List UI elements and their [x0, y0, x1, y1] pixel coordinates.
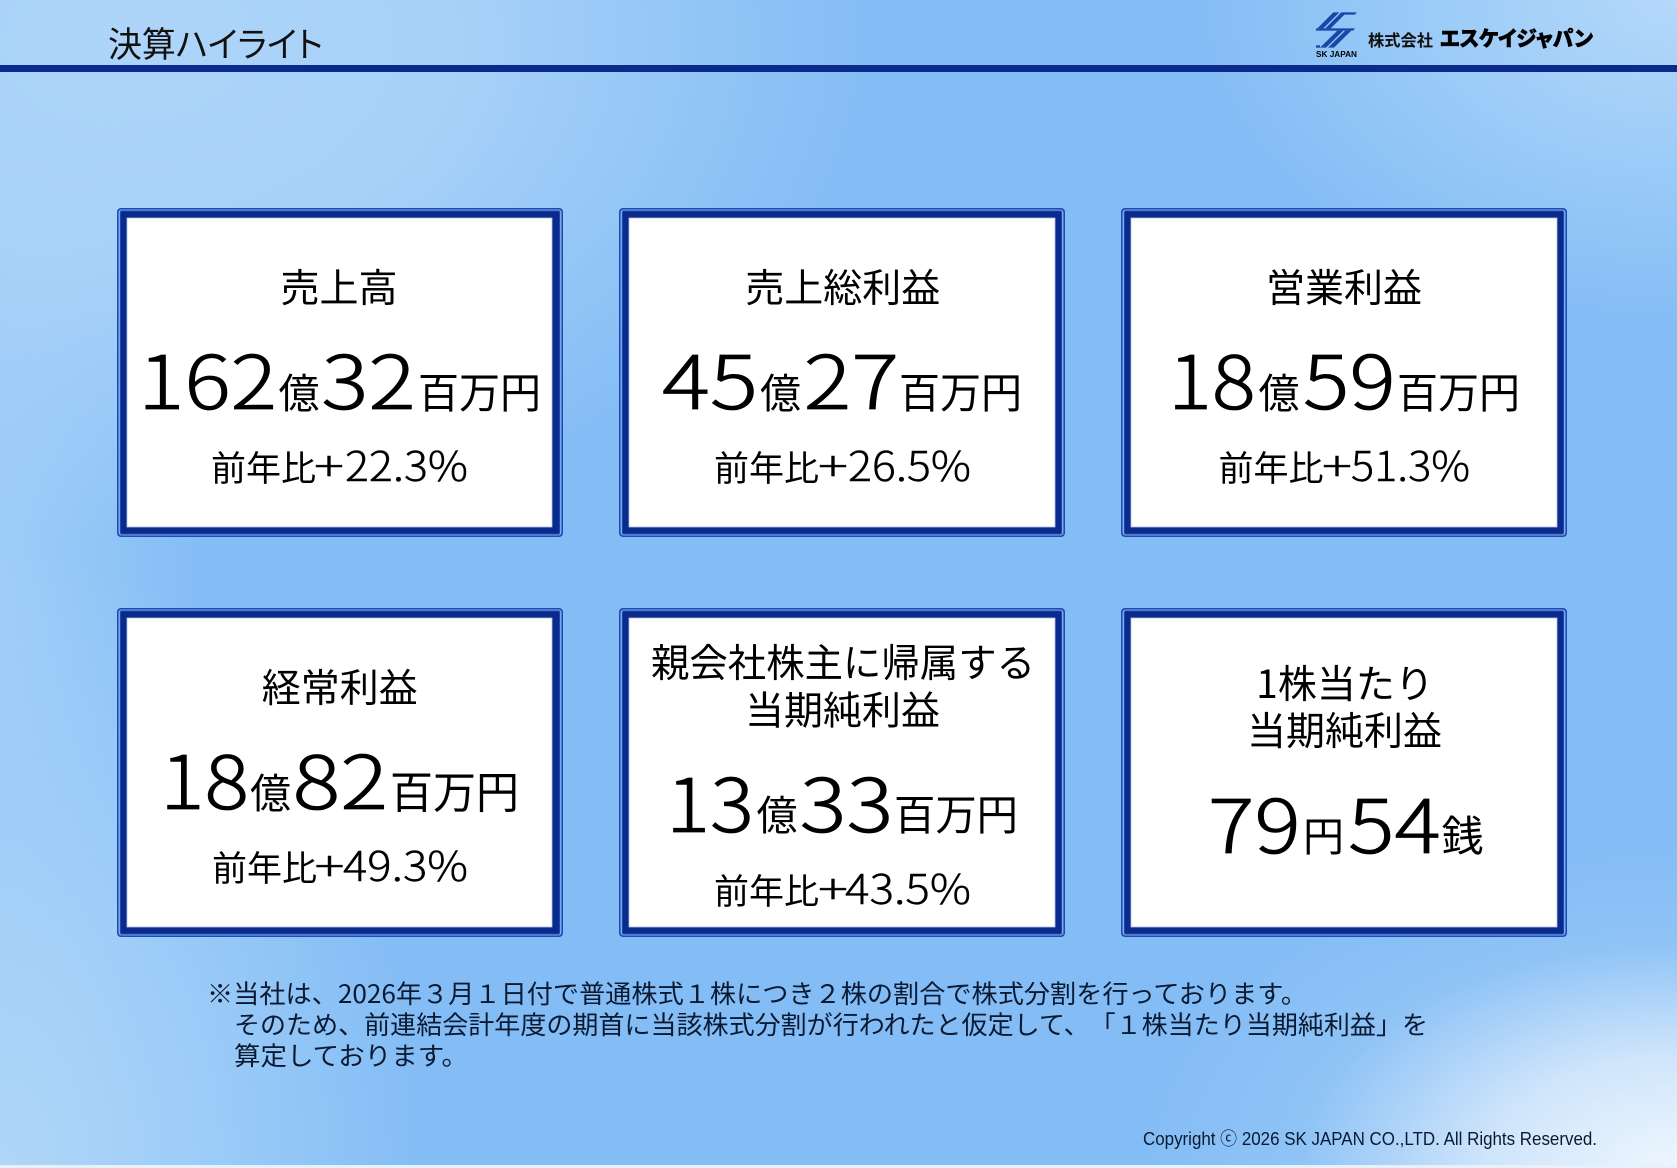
company logo: [1316, 12, 1593, 59]
card frame: [1121, 208, 1567, 537]
value: 百万円: [390, 757, 519, 821]
year on year: +: [314, 433, 344, 493]
year on year: [714, 433, 971, 493]
heading: 売上総利益: [745, 258, 940, 314]
heading: 1株当たり: [1256, 654, 1434, 710]
heading: 経常利益: [262, 658, 418, 714]
footnote: ※当社は、2026年３月１日付で普通株式１株につき２株の割合で株式分割を行っております。: [207, 975, 1307, 1011]
year on year: 前年比: [714, 864, 819, 915]
logo caption: SK JAPAN: [1316, 49, 1357, 59]
value: [662, 324, 1022, 431]
panel: 営業利益: [1121, 208, 1567, 537]
year on year: +: [818, 856, 848, 916]
value: [666, 747, 1018, 854]
footnote: 算定しております。: [234, 1037, 468, 1073]
value: 54: [1348, 768, 1441, 875]
value: 円: [1303, 803, 1344, 863]
year on year: +: [818, 433, 848, 493]
heading: 親会社株主に帰属する: [651, 633, 1035, 689]
footnote: そのため、前連結会計年度の期首に当該株式分割が行われたと仮定して、「１株当たり当期純利益」を: [234, 1006, 1428, 1042]
value: 億: [1258, 360, 1300, 420]
year on year: 前年比: [212, 841, 317, 892]
value: 百万円: [1397, 360, 1520, 421]
value: 32: [321, 324, 416, 431]
year on year: [1218, 433, 1470, 493]
heading: 営業利益: [1266, 258, 1422, 314]
value: 33: [800, 747, 893, 854]
card frame: [619, 208, 1065, 537]
year on year: 22.3%: [345, 433, 468, 493]
year on year: [211, 433, 468, 493]
heading: [651, 633, 1035, 736]
value: 億: [756, 782, 798, 842]
value: 億: [250, 760, 291, 820]
panel: 売上高: [117, 208, 563, 537]
panel: 売上総利益: [619, 208, 1065, 537]
year on year: 43.5%: [845, 856, 971, 916]
copyright: Copyright ⓒ 2026 SK JAPAN CO.,LTD. All Rights Reserved.: [1143, 1129, 1597, 1149]
value: 162: [138, 324, 277, 431]
panel: 経常利益: [117, 608, 563, 937]
year on year: 前年比: [714, 441, 819, 492]
company name: 株式会社: [1368, 27, 1433, 51]
value: 銭: [1442, 803, 1484, 864]
year on year: [714, 856, 971, 916]
value: [138, 324, 541, 431]
value: 45: [662, 324, 758, 431]
value: 百万円: [899, 360, 1022, 421]
value: 59: [1303, 324, 1396, 431]
value: [1168, 324, 1520, 431]
value: 82: [293, 724, 388, 831]
value: 億: [278, 360, 320, 420]
company name katakana: エスケイジャパン: [1440, 23, 1593, 53]
icon: SK JAPAN mark: [1316, 12, 1357, 48]
value: 百万円: [894, 782, 1018, 843]
value: [160, 724, 519, 831]
heading: 当期純利益: [1247, 701, 1442, 757]
title: 決算ハイライト: [108, 17, 323, 68]
panel: 1株当たり当期純利益: [1121, 608, 1567, 937]
value: 18: [1168, 324, 1256, 431]
footnote: [207, 975, 1428, 1073]
year on year: +: [1322, 433, 1352, 493]
year on year: 前年比: [1218, 441, 1324, 492]
card frame: [1121, 608, 1567, 937]
year on year: [212, 833, 468, 893]
header rule: [0, 65, 1677, 72]
year on year: +: [314, 833, 344, 893]
heading: [1247, 654, 1442, 757]
card frame: [117, 208, 563, 537]
year on year: 51.3%: [1351, 433, 1470, 493]
card frame: [619, 608, 1065, 937]
year on year: 前年比: [211, 441, 316, 492]
value: 18: [160, 724, 249, 831]
card frame: [117, 608, 563, 937]
heading: 売上高: [280, 258, 398, 314]
panel: 親会社株主に帰属する当期純利益: [619, 608, 1065, 937]
value: 億: [760, 360, 801, 420]
value: 百万円: [418, 360, 541, 421]
value: 13: [666, 747, 754, 854]
year on year: 49.3%: [343, 833, 468, 893]
value: 27: [804, 324, 899, 431]
value: [1208, 768, 1484, 875]
value: 79: [1208, 768, 1301, 875]
bottom edge strip: [0, 1165, 1677, 1168]
heading: 当期純利益: [745, 680, 940, 736]
year on year: 26.5%: [848, 433, 971, 493]
